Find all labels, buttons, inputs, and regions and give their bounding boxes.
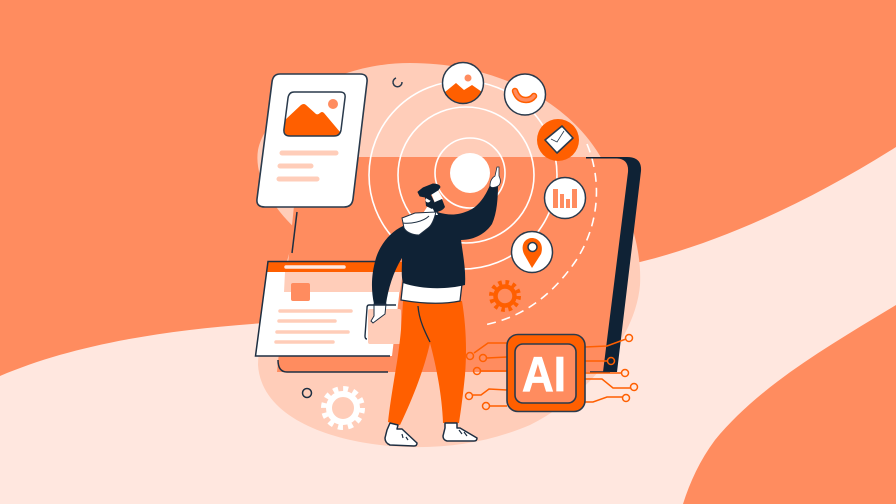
icon: image (442, 62, 484, 104)
browser window (256, 262, 403, 356)
right shoe (443, 423, 477, 441)
tablet screen (277, 157, 632, 372)
background blob (257, 63, 640, 447)
shirt hem (401, 282, 462, 303)
sweater (372, 184, 498, 304)
window text lines (276, 311, 351, 342)
chip label: AI (522, 348, 566, 402)
AI chip (507, 334, 585, 412)
card image (284, 92, 345, 136)
circuit lines (466, 334, 638, 410)
person (365, 167, 500, 446)
background wave band (0, 147, 896, 504)
connector line (292, 212, 297, 253)
dashed arc (484, 144, 596, 325)
tablet frame (278, 157, 641, 372)
icon: phone (504, 74, 546, 115)
left shoe (385, 423, 417, 446)
icon: location pin (512, 232, 552, 272)
gear: white (324, 389, 362, 427)
small arc (393, 78, 402, 87)
head (418, 184, 445, 215)
pants (388, 301, 466, 425)
card: image post (257, 74, 367, 207)
signal rings (369, 81, 557, 269)
hand holding tablet (371, 304, 386, 323)
center white circle (450, 153, 490, 193)
hood (402, 212, 436, 235)
gear: orange (492, 283, 518, 309)
icon: bar chart (544, 178, 586, 218)
small ring (302, 388, 312, 398)
icon: mail (537, 119, 579, 161)
card text lines (279, 153, 336, 179)
hand pointing (490, 167, 500, 188)
window header (267, 262, 403, 272)
